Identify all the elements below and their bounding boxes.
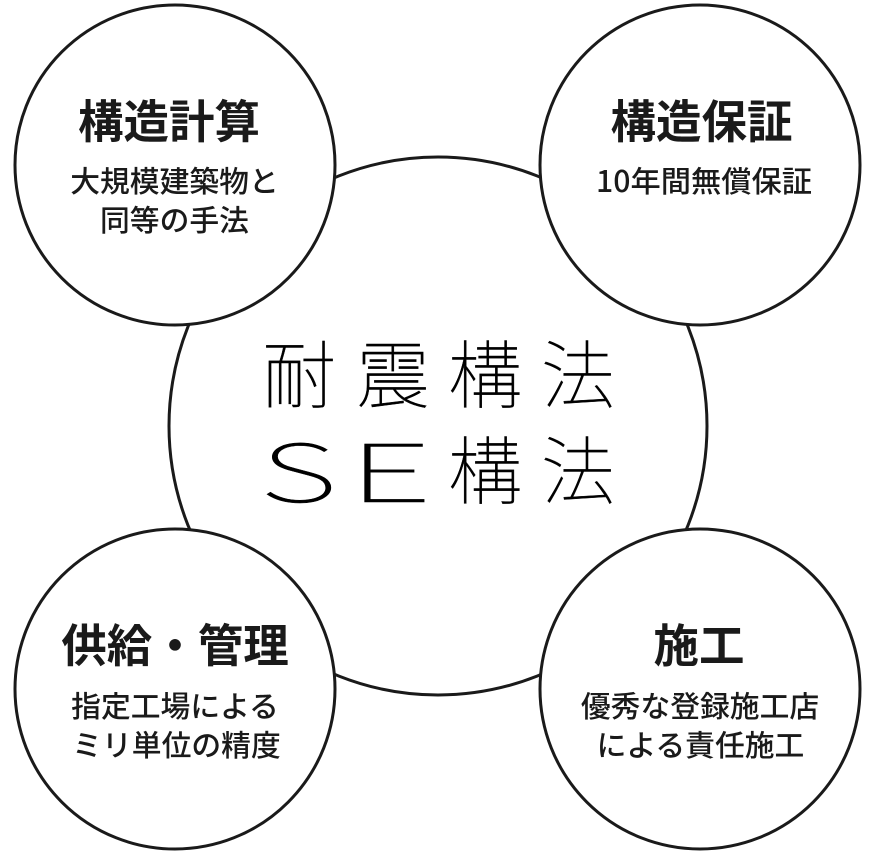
panel: supply and management: 供給・管理 — [61, 621, 289, 672]
central circle — [169, 157, 707, 695]
center title: 構 — [448, 413, 522, 520]
panel: construction: による責任施工 — [597, 730, 804, 763]
center title — [260, 317, 615, 526]
panel: construction — [540, 529, 860, 849]
panel: structural calculation — [15, 5, 335, 325]
panel: construction: 施工 — [653, 621, 745, 672]
panel: structural warranty: 10年間無償保証 — [596, 157, 812, 201]
panel: structural warranty — [540, 5, 860, 325]
panel: supply and management: 指定工場による — [71, 691, 279, 724]
panel: supply and management: ミリ単位の精度 — [72, 730, 281, 763]
center title: S — [260, 410, 337, 526]
panel: structural warranty: 構造保証 — [610, 97, 793, 148]
panel: structural calculation: 同等の手法 — [100, 205, 249, 238]
center title: 震 — [356, 317, 430, 424]
panel: structural calculation: 大規模建築物と — [70, 166, 279, 199]
panel: structural calculation: 構造計算 — [78, 97, 260, 148]
center title: 耐 — [262, 317, 336, 424]
panel: construction: 優秀な登録施工店 — [581, 691, 819, 724]
center title: E — [348, 410, 432, 526]
center title: 構 — [448, 317, 522, 424]
panel: supply and management — [15, 529, 335, 849]
center title: 法 — [541, 317, 615, 424]
center title: 法 — [541, 413, 615, 520]
